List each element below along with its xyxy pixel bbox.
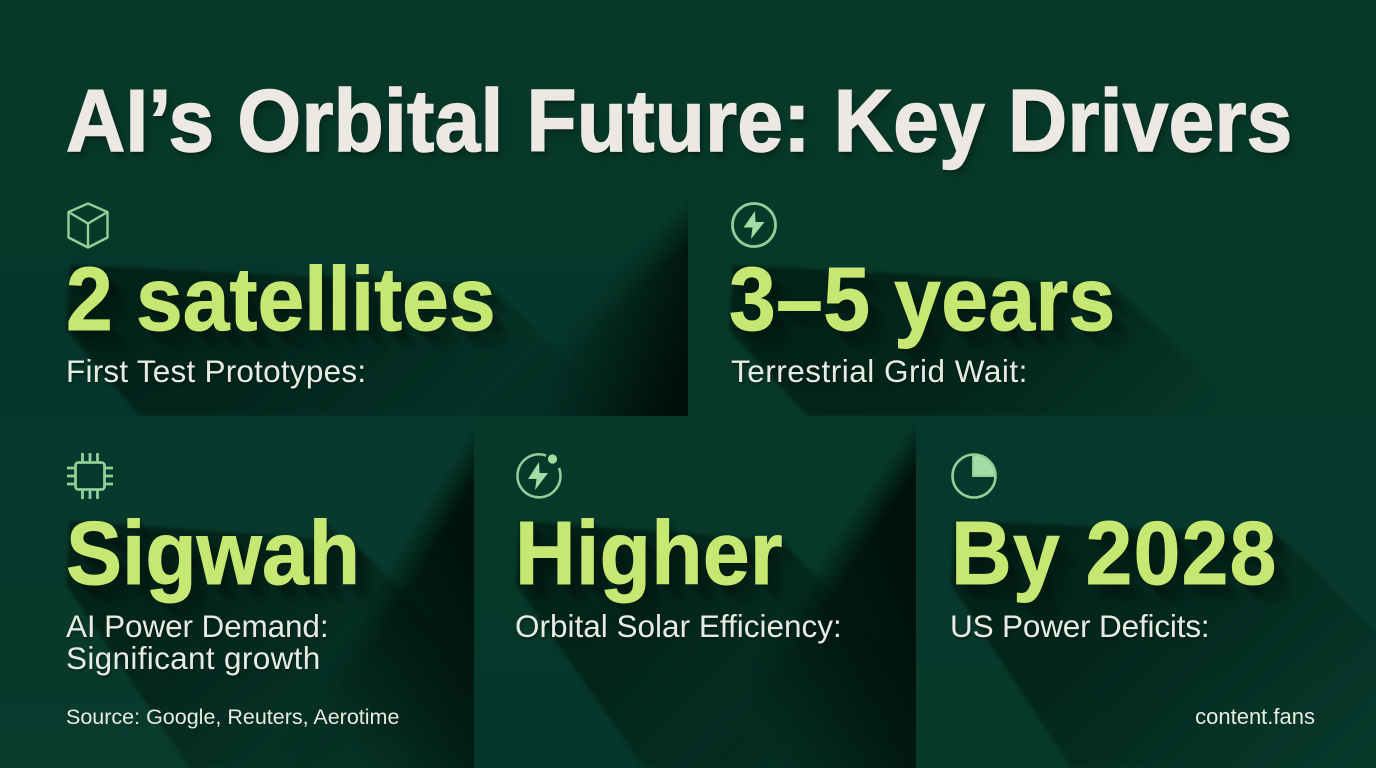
- stat: 2 satellites: 2 satellites: [66, 249, 496, 349]
- brand note: content.fans: [1195, 704, 1315, 729]
- icon: pie chart: [951, 453, 997, 499]
- icon: orbital solar: [516, 453, 562, 499]
- panel: terrestrial grid wait: [688, 190, 1376, 416]
- icon: bolt in circle: [731, 202, 777, 248]
- label: first test prototypes: First Test Prototypes:: [66, 353, 366, 389]
- title: AI’s Orbital Future: Key Drivers: [66, 72, 1293, 170]
- stat: higher: Higher: [515, 503, 783, 603]
- label: ai power demand, significant growth: Significant growth: [66, 640, 321, 676]
- label: ai power demand, significant growth: [66, 608, 328, 678]
- label: us power deficits: US Power Deficits:: [950, 608, 1210, 644]
- icon: chip: [67, 453, 113, 499]
- panel: first test prototypes: [65, 202, 688, 416]
- panel: us power deficits: [916, 416, 1376, 768]
- stat: 3-5 years: 3–5 years: [729, 249, 1116, 349]
- source note: Source: Google, Reuters, Aerotime: [66, 705, 399, 729]
- panel: ai power demand: [66, 440, 474, 768]
- panel: orbital solar efficiency: [516, 431, 916, 768]
- stat: sigwah: Sigwah: [66, 503, 360, 603]
- label: terrestrial grid wait: Terrestrial Grid Wait:: [731, 353, 1028, 389]
- icon: cube: [67, 202, 109, 249]
- label: ai power demand, significant growth: AI Power Demand:: [66, 608, 328, 644]
- stat: by 2028: By 2028: [951, 503, 1278, 603]
- label: orbital solar efficiency: Orbital Solar Efficiency:: [515, 608, 842, 644]
